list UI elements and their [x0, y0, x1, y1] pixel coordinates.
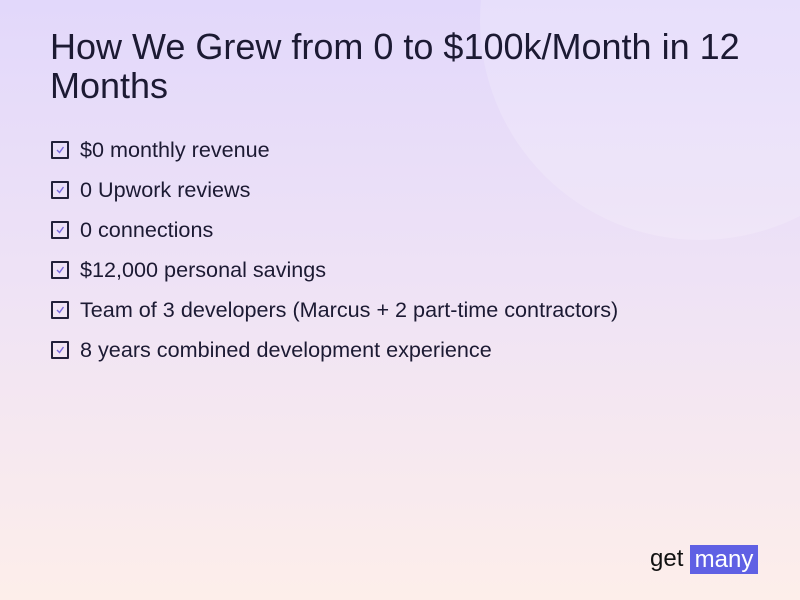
text: 8 years combined development experience	[80, 337, 492, 362]
item: experience	[51, 337, 492, 362]
item: reviews	[51, 177, 250, 202]
item: savings	[51, 257, 326, 282]
title: How We Grew from 0 to $100k/Month in 12 Months	[50, 26, 740, 106]
checklist	[51, 137, 618, 362]
logo	[650, 545, 758, 574]
logo: get	[650, 545, 683, 572]
text: 0 Upwork reviews	[80, 177, 250, 202]
item: connections	[51, 217, 213, 242]
text: 0 connections	[80, 217, 213, 242]
text: many	[695, 546, 753, 573]
item: revenue	[51, 137, 270, 162]
text: Team of 3 developers (Marcus + 2 part-time contractors)	[80, 297, 618, 322]
text: $12,000 personal savings	[80, 257, 326, 282]
item: team	[51, 297, 618, 322]
text: $0 monthly revenue	[80, 137, 270, 162]
